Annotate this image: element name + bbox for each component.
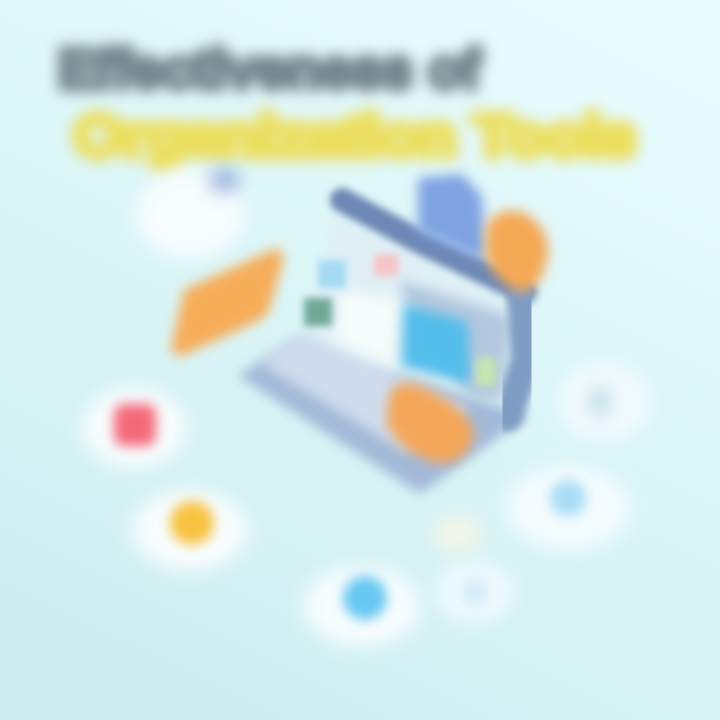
- orange tag: [172, 249, 283, 356]
- blue circle: [343, 576, 387, 620]
- laptop illustration: [238, 174, 548, 494]
- laptop screen: [312, 215, 510, 395]
- grey-blue screen panel: [400, 280, 510, 400]
- green tile: [304, 298, 332, 326]
- green small tile: [476, 358, 496, 386]
- light blue tile: [318, 260, 346, 288]
- icon: light blue bubble right: [506, 466, 630, 550]
- light blue circle: [550, 480, 586, 516]
- laptop base: [238, 332, 528, 494]
- icon: yellow bubble: [132, 490, 248, 570]
- icon: chart bubble right: [558, 364, 650, 440]
- red square: [114, 404, 156, 446]
- icon: red bubble: [82, 388, 186, 468]
- title line 1: Effectiveness of: [58, 37, 480, 100]
- screen right frame: [508, 298, 526, 416]
- title line 2: Organization Tools: [74, 104, 636, 169]
- screen top frame: [342, 200, 525, 292]
- icon: small bubble bottom right: [437, 562, 513, 622]
- yellow circle: [170, 501, 214, 545]
- icon: top mail bubble: [136, 170, 244, 258]
- icon: small pale bubble: [434, 516, 482, 552]
- icon: blue bubble bottom: [304, 566, 420, 646]
- blue folder tab: [418, 174, 486, 262]
- title: [58, 37, 636, 169]
- orange top badge: [486, 211, 548, 292]
- pink tile: [374, 254, 398, 276]
- blue screen panel: [402, 304, 470, 384]
- white screen area: [335, 290, 400, 366]
- orange bottom badge: [386, 383, 474, 464]
